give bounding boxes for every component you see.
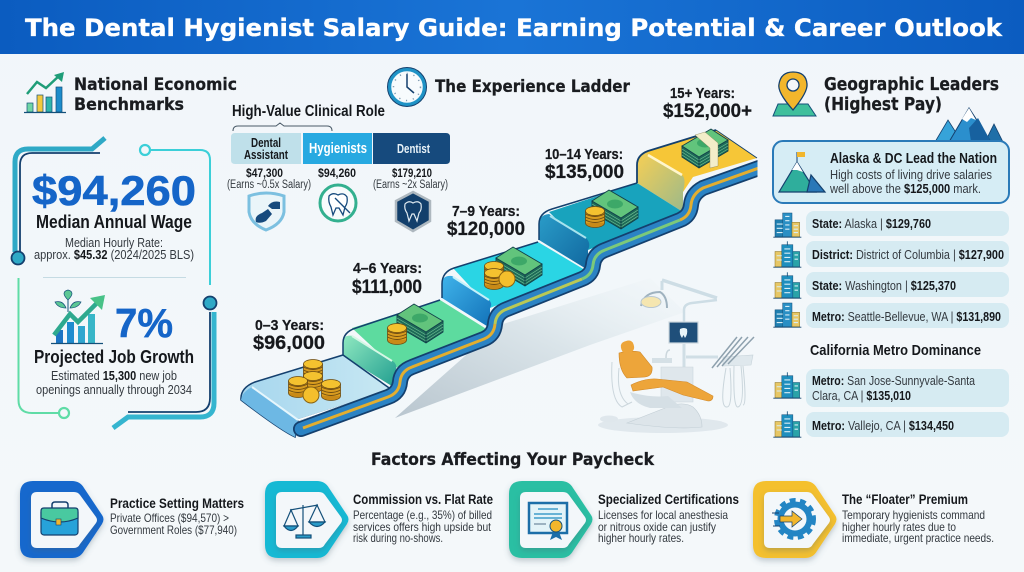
stat: median wage: approx. $45.32 (2024/2025 BLS) xyxy=(34,248,194,262)
factor: commission xyxy=(265,481,493,558)
role: dental assistant: Assistant xyxy=(244,148,289,162)
step labels: 10–14 Years: xyxy=(545,147,623,163)
step labels xyxy=(253,86,752,354)
factor: certifications: or nitrous oxide can justify xyxy=(598,520,716,534)
step labels: 0–3 Years: xyxy=(255,318,324,334)
panel: geographic leaders xyxy=(773,72,1009,437)
callout: Alaska and DC xyxy=(773,141,1009,203)
heading: Benchmarks xyxy=(74,95,184,115)
role: hygienists: Hygienists xyxy=(309,141,367,157)
heading: Geographic Leaders xyxy=(824,75,999,95)
row: District of Columbia xyxy=(773,241,1009,267)
factor: floater: Temporary hygienists command xyxy=(842,508,985,522)
ladder shadow xyxy=(395,278,685,418)
icon: growth chart with leaves xyxy=(51,290,105,344)
illustration: dental chair xyxy=(598,280,754,433)
stat: job growth: Estimated 15,300 new job xyxy=(51,369,177,383)
stat: median wage xyxy=(32,167,196,262)
factor: floater: The “Floater” Premium xyxy=(842,492,968,507)
heading: National Economic xyxy=(74,75,237,95)
icon: gear with arrow xyxy=(772,500,814,538)
callout: Alaska and DC: High costs of living drive salaries xyxy=(830,167,992,182)
heading: Factors Affecting Your Paycheck xyxy=(371,450,655,469)
icon: tooth badge xyxy=(320,185,356,221)
step labels: $111,000 xyxy=(352,277,422,298)
factor: practice setting: Practice Setting Matters xyxy=(110,496,244,511)
step labels: $152,000+ xyxy=(663,101,752,122)
icon: mountain flag xyxy=(779,152,825,192)
row: Alaska xyxy=(773,211,1009,237)
factor: certifications: Licenses for local anesthesia xyxy=(598,508,728,522)
row: San Jose: Clara, CA | $135,010 xyxy=(812,388,911,403)
stat: median wage: Median Hourly Rate: xyxy=(65,236,163,250)
factor: certifications: higher hourly rates. xyxy=(598,531,684,545)
row: Washington: State: Washington | $125,370 xyxy=(812,278,956,293)
panel: factors affecting your paycheck xyxy=(20,450,994,558)
callout: Alaska and DC: well above the $125,000 mark. xyxy=(829,181,981,196)
step 4: 10-14 years xyxy=(539,183,683,270)
factor: practice setting: Private Offices ($94,570) > xyxy=(110,511,229,525)
row: Seattle-Bellevue xyxy=(773,303,1009,328)
icon: certificate xyxy=(529,503,567,540)
role: dental assistant: $47,300 xyxy=(246,166,283,180)
step labels: $120,000 xyxy=(447,219,525,240)
stat: median wage: $94,260 xyxy=(32,167,196,214)
icon: map pin xyxy=(773,72,816,116)
icon: tooth hexagon xyxy=(396,192,430,231)
role: dentist xyxy=(373,133,450,191)
step labels: $96,000 xyxy=(253,333,325,354)
factor: commission: Commission vs. Flat Rate xyxy=(353,492,493,507)
illustration: mountains xyxy=(935,108,1003,142)
icon: bar chart with arrow xyxy=(24,72,66,112)
row: District of Columbia: District: District of Columbia | $127,900 xyxy=(812,247,1004,262)
panel: high-value clinical role xyxy=(227,103,450,231)
icon: clock xyxy=(388,68,426,106)
step labels: $135,000 xyxy=(545,162,624,183)
step 5: 15+ years xyxy=(637,129,757,212)
factor: commission: Percentage (e.g., 35%) of billed xyxy=(353,508,492,522)
factor: commission: services offers high upside but xyxy=(353,520,492,534)
row: Vallejo: Metro: Vallejo, CA | $134,450 xyxy=(812,418,954,433)
factor: certifications xyxy=(509,481,739,558)
title banner: The Dental Hygienist Salary Guide: Earning Potential & Career Outlook xyxy=(25,14,1003,42)
panel: the experience ladder xyxy=(241,68,770,437)
icon: scales xyxy=(284,505,325,538)
ladder side band xyxy=(301,164,770,429)
callout: Alaska and DC: Alaska & DC Lead the Nation xyxy=(830,151,997,167)
row: Alaska: State: Alaska | $129,760 xyxy=(812,216,931,231)
heading: The Experience Ladder xyxy=(435,77,631,97)
step labels: 4–6 Years: xyxy=(353,261,422,277)
step 1: 0-3 years xyxy=(241,355,392,437)
stat: median wage: Median Annual Wage xyxy=(36,212,192,232)
stat: job growth: 7% xyxy=(115,300,173,346)
role: dental assistant xyxy=(227,133,311,191)
stat: job growth xyxy=(34,300,194,397)
factor: floater: higher hourly rates due to xyxy=(842,520,956,534)
factor: floater xyxy=(753,481,994,558)
icon: briefcase xyxy=(41,502,78,535)
role: dentist: Dentist xyxy=(397,142,431,156)
heading xyxy=(74,75,237,115)
heading: (Highest Pay) xyxy=(824,95,942,115)
role: hygienists: $94,260 xyxy=(318,166,356,180)
step 2: 4-6 years xyxy=(343,300,488,388)
row: San Jose: Metro: San Jose-Sunnyvale-Santa xyxy=(812,373,976,388)
row: Vallejo xyxy=(773,411,1009,437)
role: dentist: (Earns ~2x Salary) xyxy=(373,179,448,191)
role: hygienists xyxy=(303,133,372,180)
subheading: California: California Metro Dominance xyxy=(810,342,981,359)
heading xyxy=(824,75,999,115)
role: dental assistant: (Earns ~0.5x Salary) xyxy=(227,179,311,191)
row: Seattle-Bellevue: Metro: Seattle-Bellevue, WA | $131,890 xyxy=(812,309,1001,324)
step labels: 7–9 Years: xyxy=(452,204,520,220)
factor: certifications: Specialized Certifications xyxy=(598,492,739,507)
factor: floater: immediate, urgent practice needs. xyxy=(842,531,994,545)
row: Washington xyxy=(773,272,1009,298)
frame lines xyxy=(12,138,216,428)
row: San Jose xyxy=(773,369,1009,407)
step 3: 7-9 years xyxy=(442,242,585,328)
role: dental assistant: Dental xyxy=(251,136,281,150)
icon: shield xyxy=(249,193,284,230)
role: dentist: $179,210 xyxy=(392,166,432,180)
step labels: 15+ Years: xyxy=(670,86,735,102)
title banner xyxy=(0,0,1024,54)
panel: national economic benchmarks xyxy=(12,72,237,428)
heading: High-Value Clinical Role xyxy=(232,103,385,120)
factor: practice setting: Government Roles ($77,940) xyxy=(110,523,237,537)
stat: job growth: openings annually through 2034 xyxy=(36,383,192,397)
stat: job growth: Projected Job Growth xyxy=(34,347,194,367)
factor: commission: risk during no-shows. xyxy=(353,531,443,545)
factor: practice setting xyxy=(20,481,244,558)
